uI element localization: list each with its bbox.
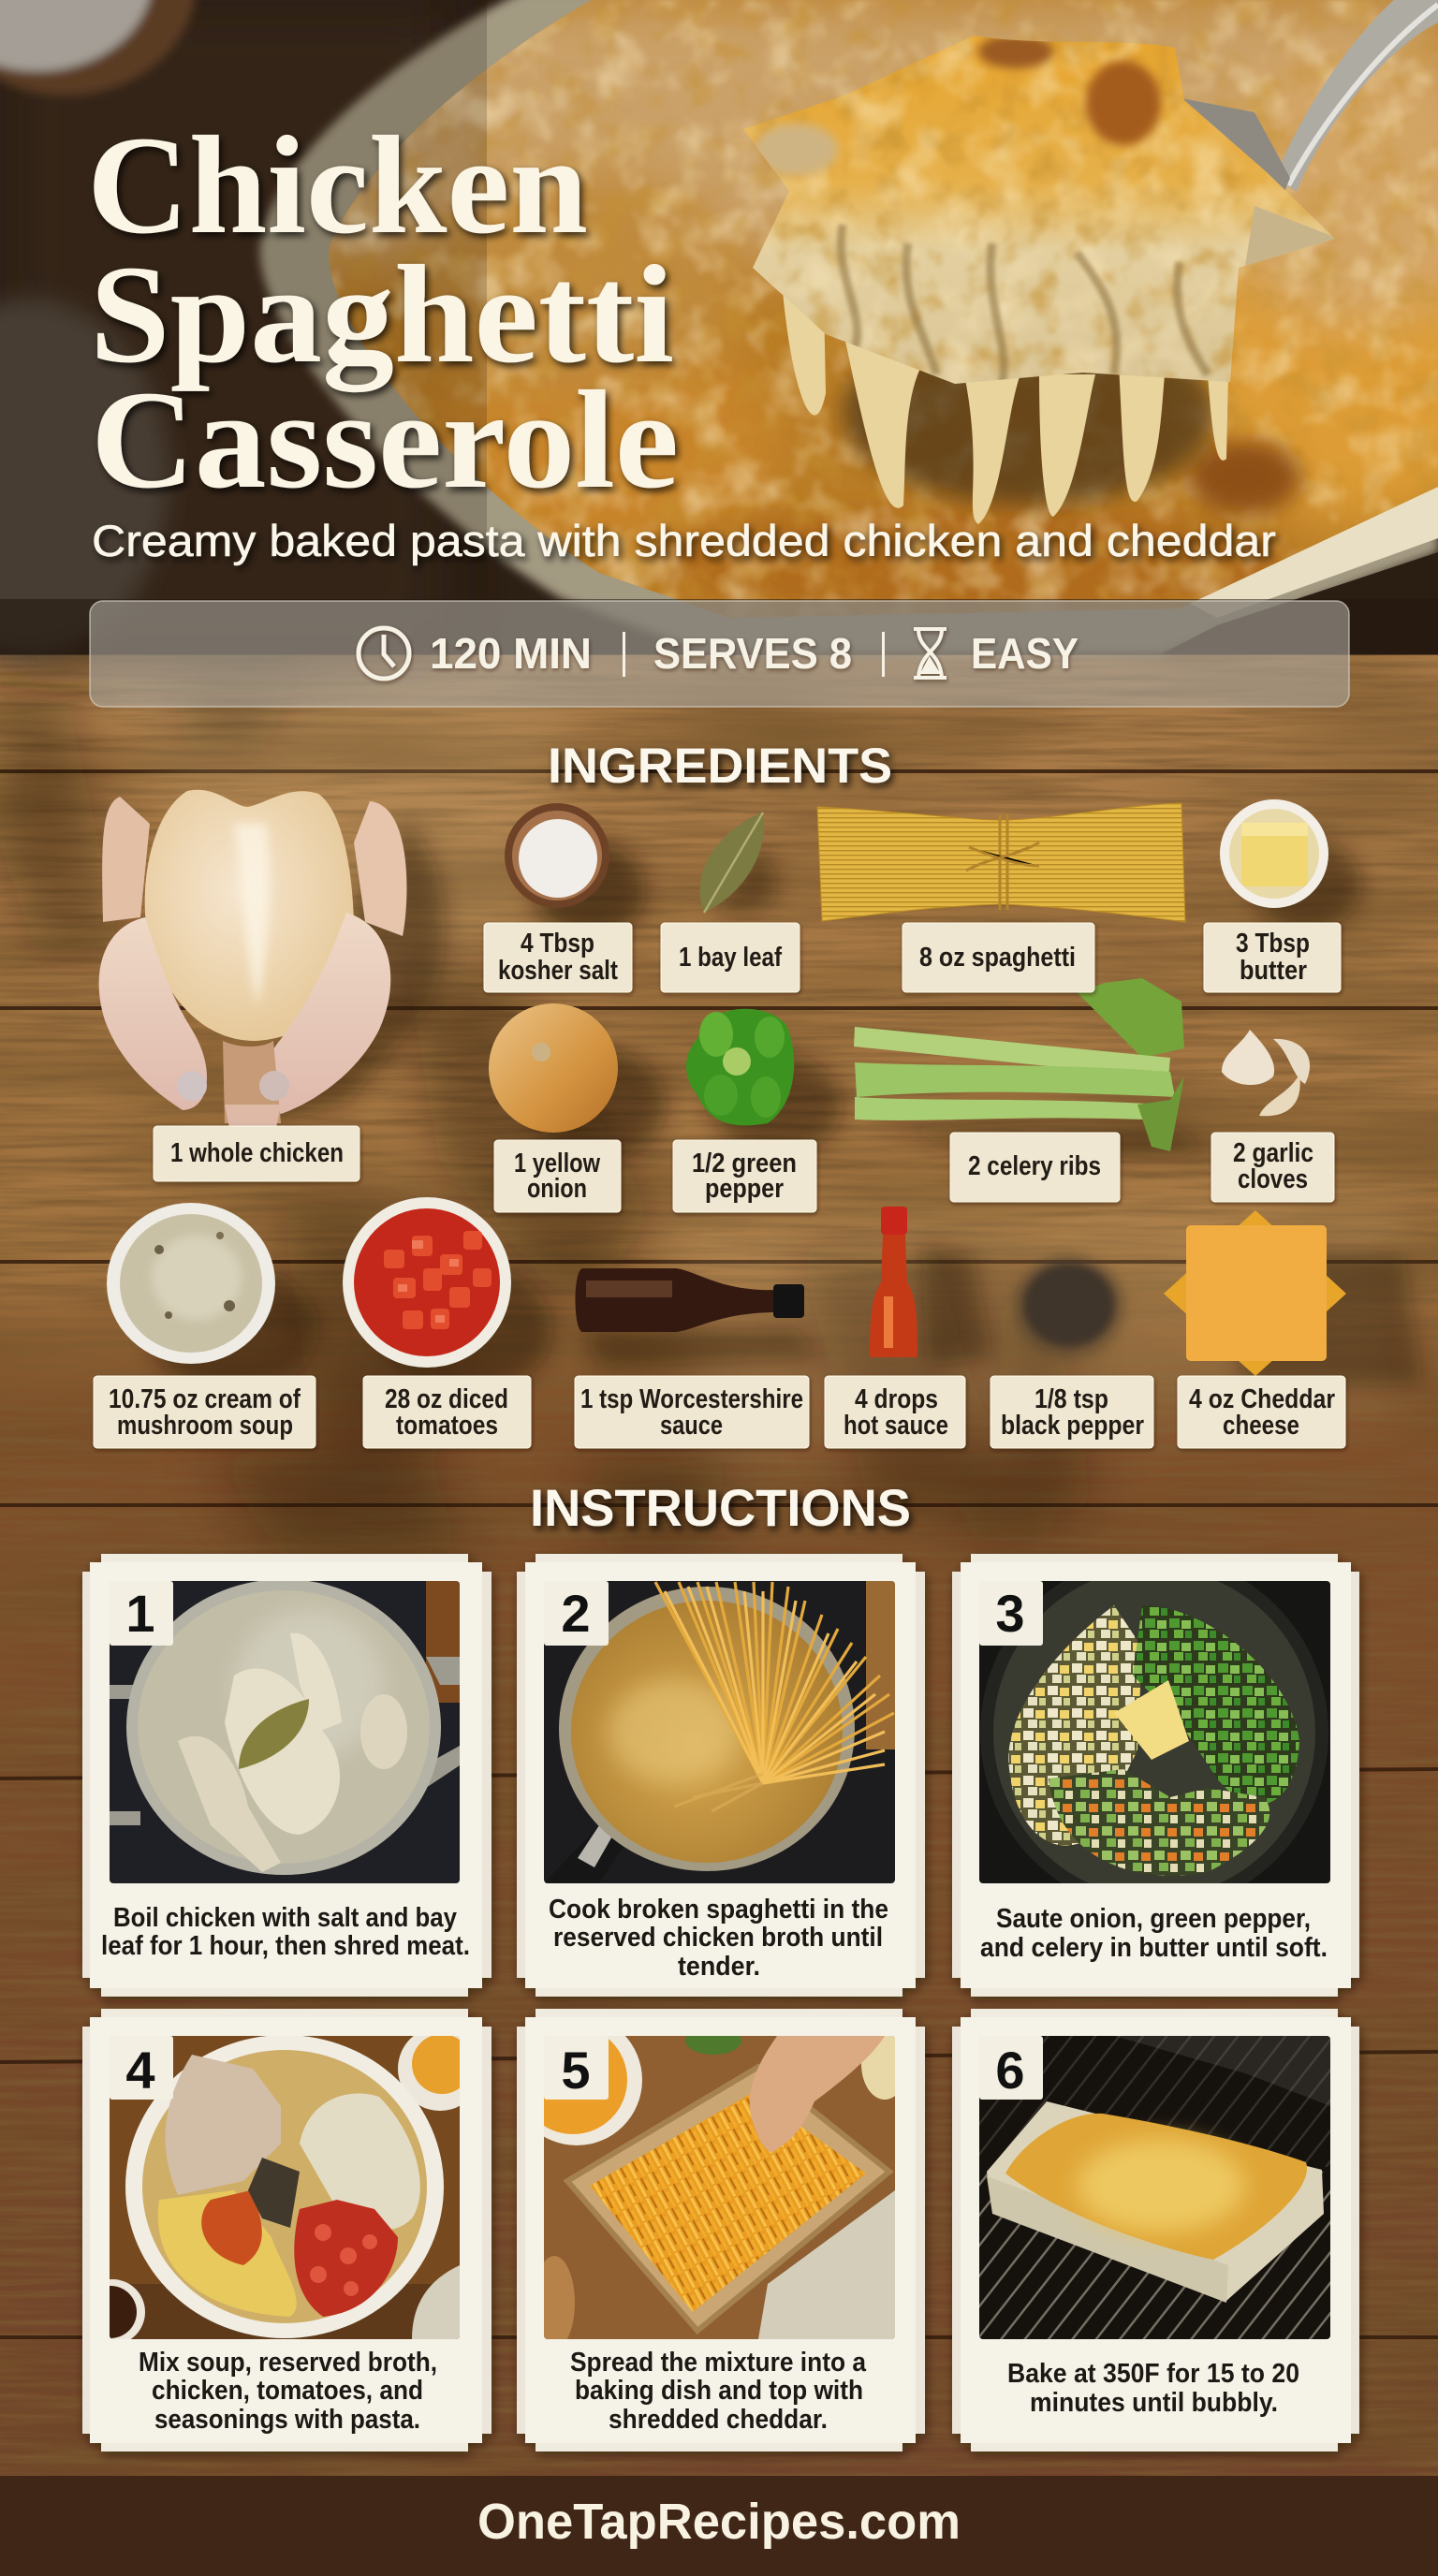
caption 3 [980,1904,1328,1963]
photo: mixing bowl [80,2027,482,2345]
ingredient: celery ribs [854,978,1217,1170]
hero: casserole photograph [0,0,1438,655]
label: soup: 10.75 oz cream of [109,1384,301,1414]
linen towel [0,300,169,655]
label: kosher salt: 4 Tbsp [521,929,594,959]
badge: 6: 6 [995,2041,1025,2100]
step 3 card [952,1554,1359,1997]
label: garlic: cloves [1238,1164,1308,1194]
caption 6: Bake at 350F for 15 to 20 [1007,2359,1299,2389]
ingredient: cheddar cheese [1164,1210,1423,1385]
footer website: OneTapRecipes.com [477,2494,961,2550]
caption 5: shredded cheddar. [609,2405,828,2435]
label: hot sauce [825,1376,965,1448]
label: Worcestershire: 1 tsp Worcestershire [580,1384,803,1414]
caption 5: Spread the mixture into a [570,2348,867,2378]
ingredient: diced tomatoes [343,1197,552,1395]
label: cheddar: cheese [1223,1411,1299,1441]
photo: chicken boiling in pot [110,1579,468,1883]
cheese strands [782,281,1228,524]
label: onion: onion [527,1174,587,1204]
heading: instructions: INSTRUCTIONS [530,1478,911,1537]
photo: spaghetti in broth [544,1581,895,1883]
badge: 3: 3 [995,1584,1025,1643]
stats bar [90,601,1349,707]
ingredient: butter dish [1220,799,1362,931]
photo: topping with cheddar [511,2014,908,2349]
cheesy scoop [740,28,1348,402]
caption 6 [1007,2359,1299,2418]
step 4 card [80,2009,492,2452]
ingredient: garlic cloves [1222,1030,1310,1116]
label: hot sauce: hot sauce [844,1411,948,1441]
caption 5 [570,2348,867,2435]
stat: difficulty: EASY [971,629,1078,678]
badge: 3 [979,1581,1043,1646]
caption 2: Cook broken spaghetti in the [549,1895,888,1925]
salt bowl in corner [0,0,197,95]
ingredient: yellow onion [489,1003,667,1161]
badge: 4 [110,2036,173,2100]
icon: clock [359,628,409,679]
label: spaghetti [902,923,1094,992]
label: black pepper [990,1376,1153,1448]
caption 4 [139,2348,437,2435]
label: spaghetti: 8 oz spaghetti [919,943,1076,973]
label: butter: 3 Tbsp [1236,929,1310,959]
ingredient: cream of mushroom soup [107,1203,318,1395]
caption 3: Saute onion, green pepper, [996,1904,1311,1934]
ingredient: whole chicken [99,790,445,1133]
label: garlic [1211,1133,1334,1202]
instructions panel [80,1554,1359,2452]
title [87,108,679,518]
label: Worcestershire [575,1376,809,1448]
label: butter: butter [1240,956,1307,986]
ingredient: spaghetti bundle [817,803,1185,922]
step 6 card [952,2009,1359,2452]
label: green pepper [673,1140,816,1212]
badge: 4: 4 [125,2041,155,2100]
label: green pepper: 1/2 green [692,1149,797,1178]
caption 2: tender. [678,1952,760,1982]
spoon [1181,0,1438,243]
ingredient: Worcestershire bottle [575,1268,824,1367]
label: tomatoes: tomatoes [396,1411,498,1441]
label: soup: mushroom soup [117,1411,293,1441]
label: cheddar: 4 oz Cheddar [1189,1384,1335,1414]
icon: hourglass [914,629,946,678]
wood table background [0,654,1438,2476]
label: bay leaf [661,923,800,992]
label: black pepper: black pepper [1001,1411,1144,1441]
ingredient: bay leaf [700,812,777,915]
label: soup [94,1376,315,1448]
label: kosher salt: kosher salt [498,956,618,986]
label: tomatoes: 28 oz diced [385,1384,508,1414]
badge: 2 [544,1581,609,1646]
badge: 1: 1 [125,1584,155,1643]
caption 5: baking dish and top with [575,2376,863,2406]
badge: 5 [544,2036,609,2100]
badge: 2: 2 [561,1584,591,1643]
ingredients panel [94,790,1423,1448]
baking dish [255,0,1438,657]
caption 1: Boil chicken with salt and bay [113,1903,457,1933]
label: 1 whole chicken: 1 whole chicken [170,1138,344,1168]
title: Spaghetti [90,237,674,392]
caption 1: leaf for 1 hour, then shred meat. [101,1931,470,1961]
ingredient: hot sauce bottle [870,1207,992,1367]
caption 4: chicken, tomatoes, and [152,2376,423,2406]
title: Chicken [87,108,588,263]
label: cheddar [1178,1376,1345,1448]
label: butter [1204,923,1341,992]
heading: ingredients: INGREDIENTS [548,739,892,794]
badge: 5: 5 [561,2041,591,2100]
stat: servings: SERVES 8 [653,629,852,678]
photo: baking in oven [979,2036,1330,2339]
label: tomatoes [363,1376,531,1448]
caption 4: Mix soup, reserved broth, [139,2348,437,2378]
label: celery [950,1133,1120,1202]
caption 4: seasonings with pasta. [154,2405,420,2435]
step 5 card [511,2009,925,2452]
caption 1 [101,1903,470,1961]
ingredient labels [94,923,1345,1448]
title: Casserole [91,362,679,518]
caption 6: minutes until bubbly. [1030,2388,1278,2418]
ingredient: green pepper [686,1009,843,1156]
caption 3: and celery in butter until soft. [980,1933,1328,1963]
label: garlic: 2 garlic [1233,1138,1313,1168]
footer band [0,2476,1438,2576]
label: Worcestershire: sauce [660,1411,723,1441]
label: 1 whole chicken [154,1126,360,1181]
label: hot sauce: 4 drops [855,1384,938,1414]
badge: 6 [979,2036,1043,2100]
label: green pepper: pepper [705,1174,784,1204]
badge: 1 [110,1581,173,1646]
label: kosher salt [484,923,632,992]
caption 2 [549,1895,888,1982]
label: black pepper: 1/8 tsp [1034,1384,1108,1414]
stat: time: 120 MIN [430,629,592,678]
subtitle: Creamy baked pasta with shredded chicken and cheddar [92,516,1276,565]
step 2 card [517,1554,925,1997]
label: celery: 2 celery ribs [968,1151,1101,1181]
caption 2: reserved chicken broth until [553,1923,883,1953]
step 1 card [82,1554,492,1997]
label: onion: 1 yellow [514,1149,600,1178]
photo: sauteing vegetables [979,1555,1330,1910]
label: onion [494,1140,621,1212]
ingredient: black pepper [1011,1252,1127,1361]
label: bay leaf: 1 bay leaf [679,943,782,973]
ingredient: kosher salt bowl [505,803,646,938]
